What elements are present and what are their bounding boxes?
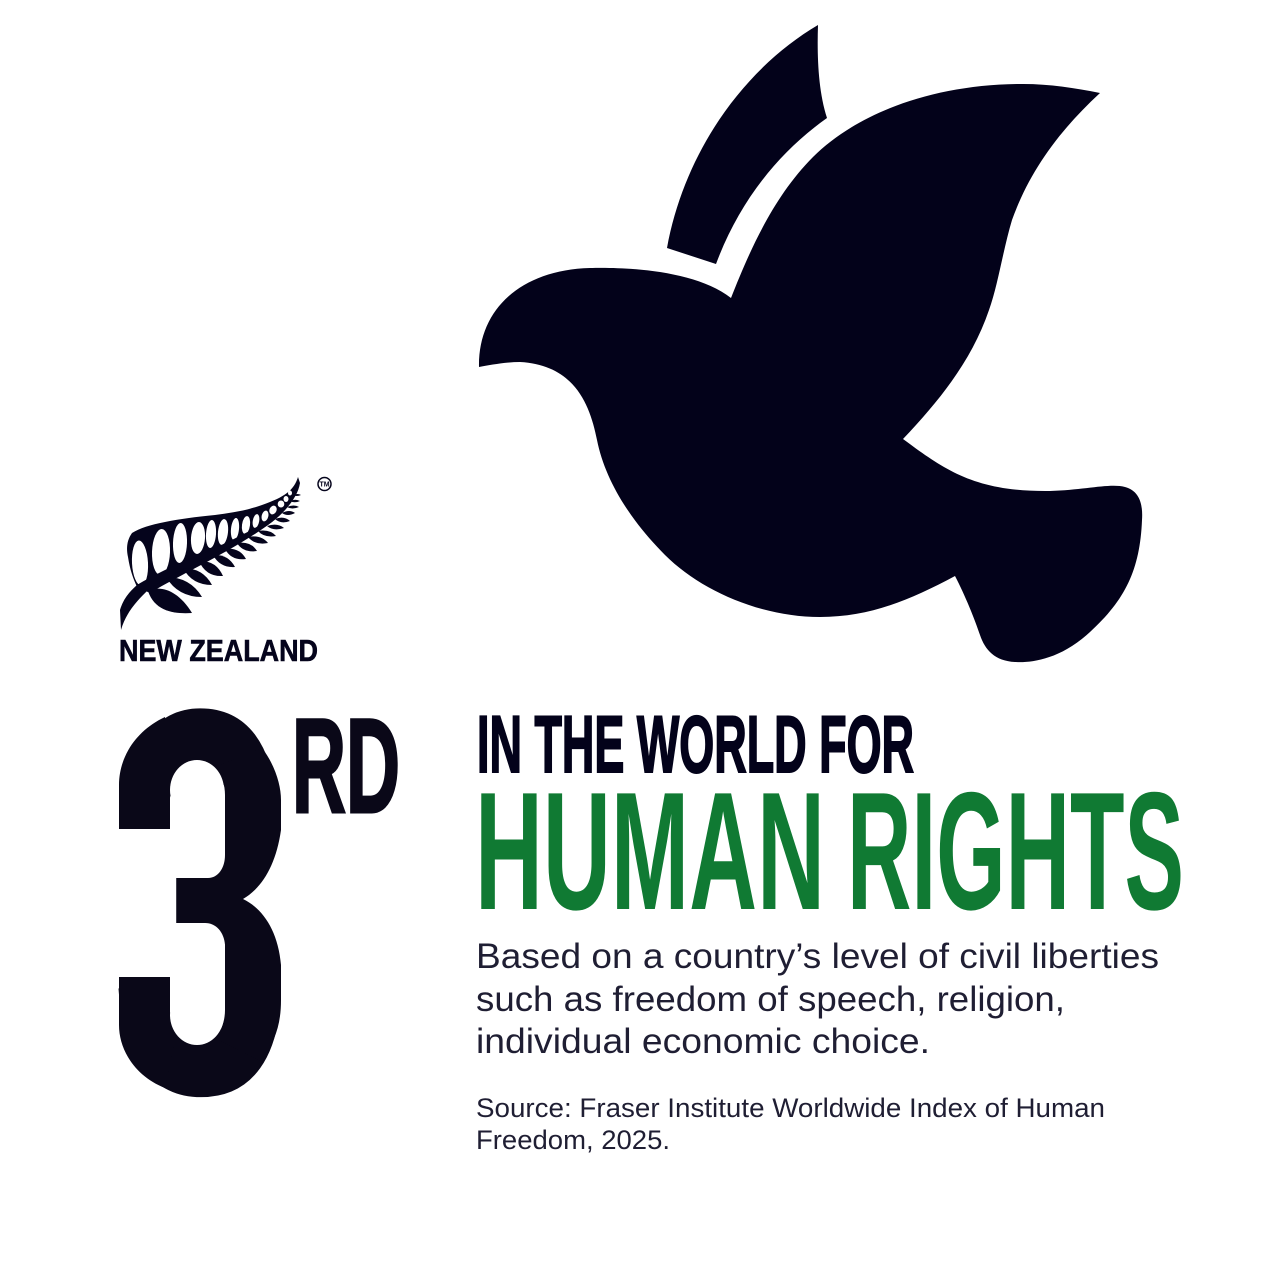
description text: [476, 937, 1159, 1061]
ordinal suffix RD: RD: [292, 692, 400, 841]
source note: Freedom, 2025.: [476, 1125, 670, 1155]
source note: Source: Fraser Institute Worldwide Index of Human: [476, 1093, 1105, 1123]
fern stem: [120, 477, 300, 630]
fern lower leaflets: [148, 494, 301, 613]
dove upper wing: [667, 25, 827, 264]
logo: New Zealand fern mark: [119, 477, 331, 668]
heading line two: HUMAN: [475, 757, 825, 945]
source note: [476, 1093, 1105, 1155]
trademark symbol: [318, 478, 331, 490]
big number: 3rd: [111, 595, 400, 1208]
description text: Based on a country’s level of civil liberties: [476, 937, 1159, 976]
description text: individual economic choice.: [476, 1022, 930, 1061]
description text: such as freedom of speech, religion,: [476, 980, 1065, 1019]
logo wordmark: NEW ZEALAND: [119, 634, 318, 668]
fern upper frond: [127, 477, 298, 593]
dove body and main wing: [479, 84, 1142, 662]
heading: [475, 700, 1184, 945]
icon: peace dove: [479, 25, 1142, 662]
trademark symbol: TM: [319, 482, 330, 488]
numeral 3: 3: [111, 595, 293, 1208]
heading line one: IN THE WORLD FOR: [477, 700, 914, 790]
